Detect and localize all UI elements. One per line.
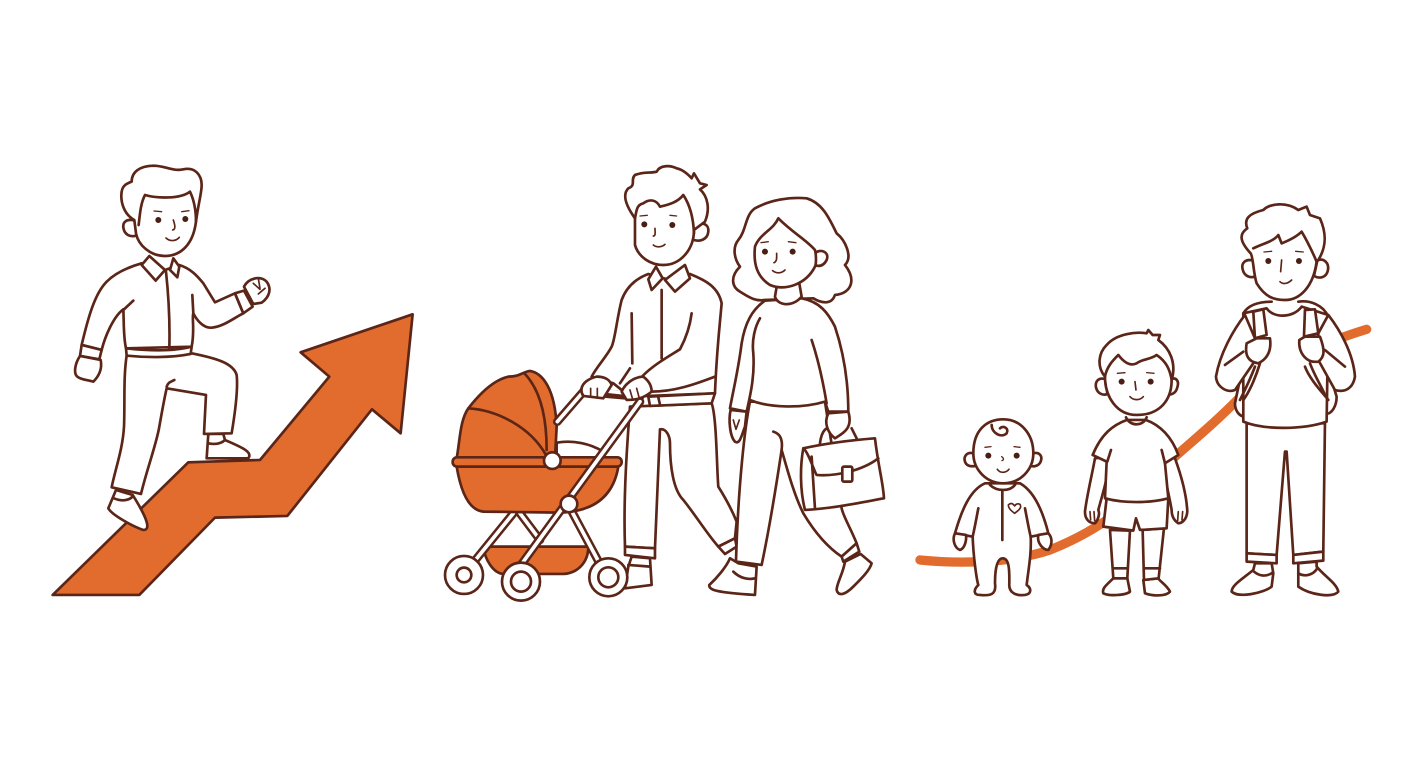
scene: man climbing a rising arrow	[53, 166, 413, 595]
stroller lower basket	[483, 547, 588, 574]
chart: orange growth curve	[920, 329, 1367, 562]
icon: orange rising arrow	[53, 314, 413, 595]
father's hands on handle	[581, 377, 612, 398]
figure: baby	[954, 419, 1051, 595]
figure: father	[592, 166, 737, 588]
icon: orange baby stroller	[445, 371, 652, 601]
scene: couple walking with a stroller	[445, 166, 884, 601]
figure: young boy	[1085, 330, 1187, 595]
figure: teenager with backpack	[1216, 204, 1355, 595]
icon: handbag	[801, 428, 884, 510]
stroller carriage	[457, 467, 618, 513]
figure: climbing man	[75, 166, 269, 530]
figure: mother	[709, 198, 884, 595]
scene: children growing along a curve	[920, 204, 1367, 595]
